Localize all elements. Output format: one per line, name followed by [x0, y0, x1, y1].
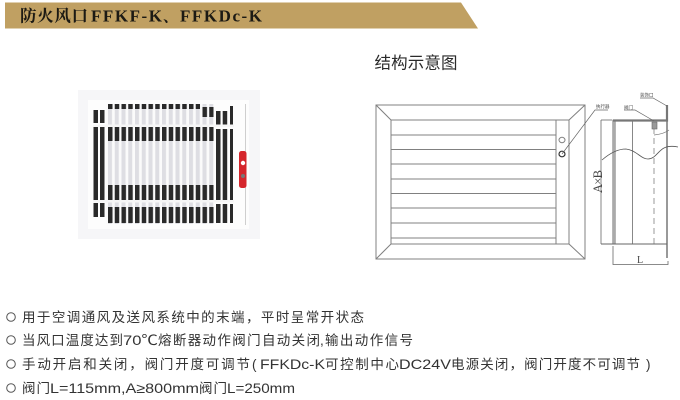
bullet 4: 阀门 — [22, 381, 50, 396]
dimension label A×B: A×B — [591, 170, 605, 193]
bullet 3: FFKDc-K — [260, 356, 326, 372]
bullet 4: L=115mm,A≥800mm — [50, 380, 199, 396]
diagram heading: 结构示意图 — [374, 54, 458, 72]
title: 、 — [163, 10, 178, 26]
bullet 2: 当风口温度达到 — [22, 333, 123, 348]
title banner — [5, 2, 478, 28]
valve label and leader — [624, 104, 654, 121]
bullet 2: 熔断器动作阀门自动关闭 — [158, 333, 320, 348]
bullet 1: 用于空调通风及送风系统中的末端，平时呈常开状态 — [22, 310, 364, 325]
bullet 4: 阀门 — [199, 381, 227, 396]
bullet 3: ) — [646, 357, 650, 372]
flange detail — [613, 105, 667, 120]
dimension L — [613, 246, 668, 264]
actuator label: 执行器 — [596, 103, 610, 110]
title: FFKDc-K — [180, 6, 263, 26]
mounting frame label and leader — [640, 92, 667, 106]
bullet 3: ( — [252, 357, 257, 372]
title — [20, 6, 263, 26]
bullet 3 — [7, 356, 650, 372]
bullet 2: 70℃ — [123, 332, 158, 348]
bullet 2: 输出动作信号 — [325, 333, 413, 348]
dimension label L: L — [637, 255, 643, 266]
bullet 3: 电源关闭，阀门开度不可调节 — [451, 357, 640, 372]
feature list — [7, 310, 650, 396]
structure diagram: front view — [376, 105, 585, 259]
structure diagram: side section — [601, 105, 678, 264]
bullet 2 — [7, 332, 413, 348]
bullet 4: L=250mm — [227, 380, 295, 396]
bullet 3: 可控制中心 — [325, 357, 400, 372]
bullet 2: , — [320, 333, 324, 348]
red fuse latch — [239, 151, 246, 188]
bullet 3: 手动开启和关闭，阀门开度可调节 — [22, 357, 250, 372]
actuator circle — [559, 151, 565, 157]
dimension A×B — [600, 120, 602, 244]
bullet 4 — [7, 380, 295, 396]
bullet 3: DC24V — [399, 356, 452, 372]
actuator leader line — [562, 110, 608, 154]
valve label and leader: 阀门 — [624, 104, 633, 111]
louvre blades — [106, 104, 214, 224]
mounting frame label and leader: 装饰口 — [640, 92, 654, 98]
product photo: fire damper vent — [78, 90, 260, 239]
title: 防火风口 — [20, 6, 88, 26]
break line — [602, 146, 678, 160]
title: FFKF-K — [91, 6, 163, 26]
